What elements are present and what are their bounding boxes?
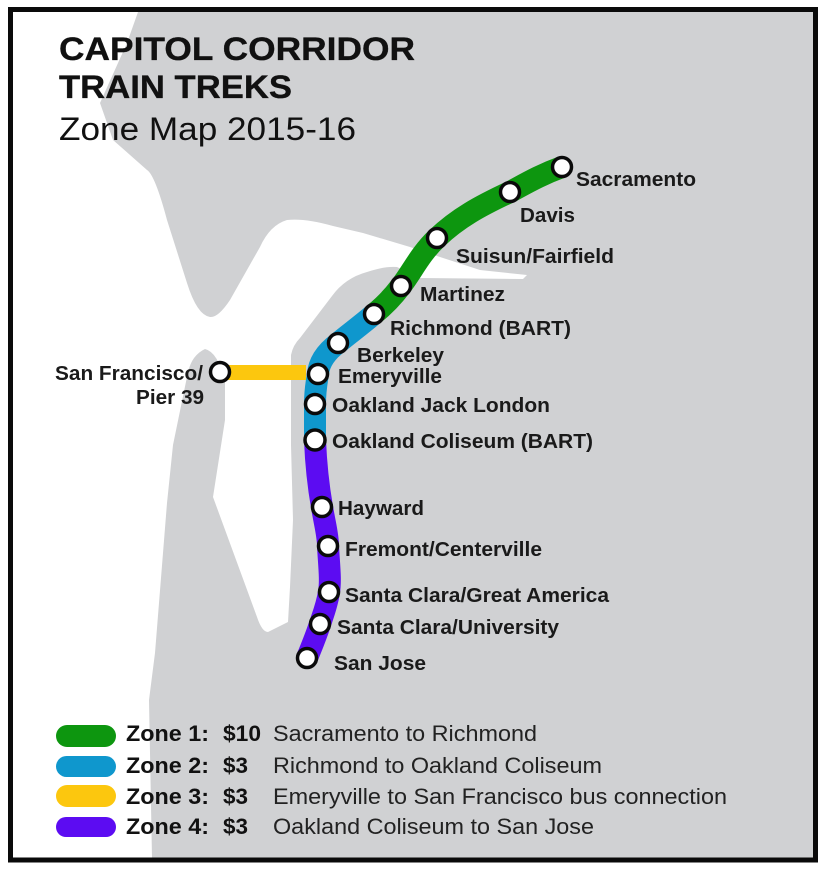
station labels: Suisun/Fairfield [456,246,614,268]
station labels: Berkeley [357,345,445,367]
station labels: Martinez [420,284,505,306]
legend row: zone 4: Oakland Coliseum to San Jose [273,814,594,839]
station labels: San Jose [334,653,426,675]
station labels: Santa Clara/University [337,617,560,639]
legend row: zone 4 [56,814,594,839]
legend row: zone 1 [56,721,537,747]
station labels: Richmond (BART) [390,318,571,340]
legend row: zone 1: $10 [223,721,261,746]
zone 4 line: purple [307,440,330,658]
station labels: Oakland Jack London [332,395,550,417]
legend row: zone 2: Zone 2: [126,753,209,778]
zone 1 line: green [374,167,562,314]
station labels: Fremont/Centerville [345,539,542,561]
zone 2 line: blue [315,314,374,440]
title [59,31,415,147]
route lines [225,167,562,658]
station labels: Hayward [338,498,424,520]
station labels: Santa Clara/Great America [345,585,610,607]
station labels [55,169,696,675]
legend row: zone 1: Sacramento to Richmond [273,721,537,746]
legend row: zone 3: Emeryville to San Francisco bus connection [273,784,727,809]
station labels: Oakland Coliseum (BART) [332,431,593,453]
station labels: San Francisco/ [55,363,203,385]
legend row: zone 3: Zone 3: [126,784,209,809]
legend row: zone 1: Zone 1: [126,721,209,746]
title: Zone Map 2015-16 [59,111,356,147]
station labels: Emeryville [338,366,442,388]
station labels: Davis [520,205,575,227]
legend [56,721,727,839]
legend row: zone 3 [56,784,727,809]
title: CAPITOL CORRIDOR [59,31,415,67]
legend row: zone 4: $3 [223,814,248,839]
legend row: zone 3: $3 [223,784,248,809]
legend row: zone 2 [56,753,602,778]
legend row: zone 2: Richmond to Oakland Coliseum [273,753,602,778]
station markers [210,158,572,668]
legend row: zone 4: Zone 4: [126,814,209,839]
zone 3 line: yellow bus connection [225,365,306,380]
station labels: Sacramento [576,169,696,191]
station labels: Pier 39 [136,387,204,409]
title: TRAIN TREKS [59,69,292,105]
legend row: zone 2: $3 [223,753,248,778]
